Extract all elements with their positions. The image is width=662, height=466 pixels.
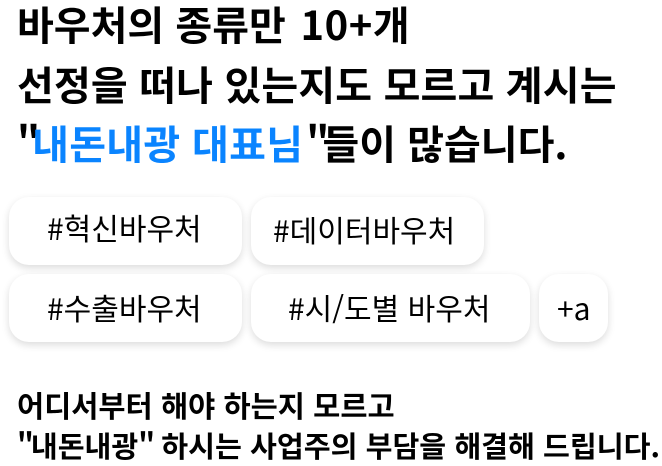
tag: 수출바우처 — [9, 274, 242, 342]
title — [17, 0, 617, 171]
tag: 혁신바우처: #혁신바우처 — [47, 205, 202, 249]
tag: +a — [539, 274, 608, 342]
tag: 혁신바우처 — [9, 197, 242, 265]
tag: 시/도별 바우처: #시/도별 바우처 — [288, 285, 490, 329]
title line 2: 선정을 떠나 있는지도 모르고 계시는 — [17, 54, 617, 112]
tag: 시/도별 바우처 — [251, 274, 530, 342]
title line 3: "내돈내광 대표님"들이 많습니다. — [17, 113, 567, 171]
closing line 2: "내돈내광" 하시는 사업주의 부담을 해결해 드립니다. — [17, 424, 660, 466]
tag: +a: +a — [557, 285, 591, 329]
tag: 데이터바우처 — [251, 197, 484, 265]
closing text — [17, 384, 660, 466]
tag: 데이터바우처: #데이터바우처 — [273, 207, 455, 251]
closing line 1: 어디서부터 해야 하는지 모르고 — [17, 384, 395, 426]
tag: 수출바우처: #수출바우처 — [47, 285, 202, 329]
